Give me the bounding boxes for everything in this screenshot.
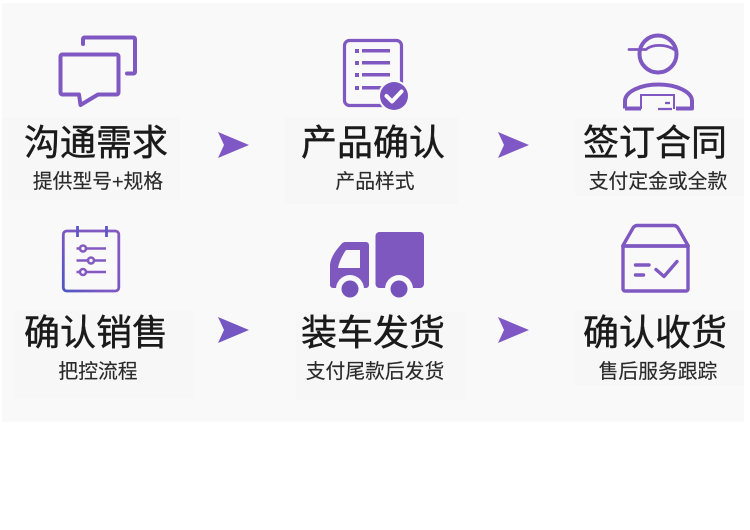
step: 确认销售: 把控流程 — [58, 361, 138, 383]
step: 产品确认: 产品确认 — [301, 122, 445, 163]
step: 产品确认 — [301, 122, 445, 193]
step: 确认收货: 售后服务跟踪 — [599, 361, 717, 383]
icon: checklist document — [344, 40, 410, 112]
icon: parcel box with check — [623, 226, 688, 291]
step: 产品确认: 产品样式 — [335, 171, 415, 193]
step: 装车发货: 装车发货 — [301, 312, 445, 353]
step: 确认销售 — [24, 312, 168, 383]
step: 签订合同 — [583, 122, 727, 193]
step: 确认销售: 确认销售 — [24, 312, 168, 353]
arrow: step 2 to 3 — [498, 132, 529, 158]
arrow: step 4 to 5 — [218, 317, 249, 343]
step: 装车发货: 支付尾款后发货 — [306, 361, 444, 383]
arrow: step 5 to 6 — [498, 317, 529, 343]
step: 确认收货: 确认收货 — [583, 312, 727, 353]
icon: chat bubbles — [60, 38, 135, 105]
icon: delivery truck — [330, 232, 424, 303]
step: 签订合同: 签订合同 — [583, 122, 727, 163]
icon: service agent with phone — [625, 36, 692, 109]
step: 签订合同: 支付定金或全款 — [589, 171, 727, 193]
icon: sliders notepad — [63, 226, 119, 291]
step: 沟通需求 — [24, 122, 168, 193]
step: 沟通需求: 提供型号+规格 — [33, 171, 163, 193]
step: 确认收货 — [583, 312, 727, 383]
step: 沟通需求: 沟通需求 — [24, 122, 168, 163]
arrow: step 1 to 2 — [218, 132, 249, 158]
step: 装车发货 — [301, 312, 445, 383]
